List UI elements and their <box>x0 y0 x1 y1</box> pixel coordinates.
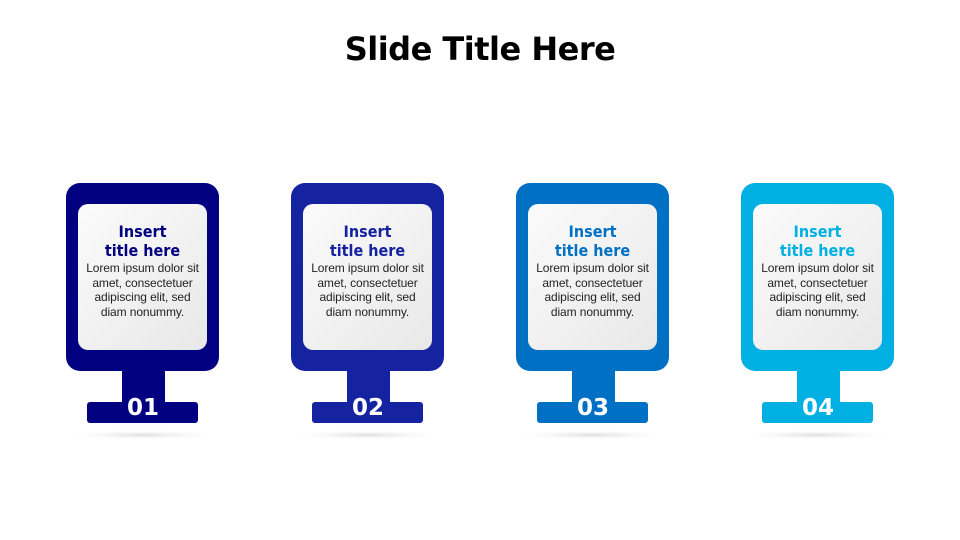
text box 1 <box>78 204 207 350</box>
text box 4: Lorem ipsum dolor sit amet, consectetuer adipiscing elit, sed diam nonummy. <box>761 261 874 318</box>
number 04: 04 <box>802 395 834 421</box>
text box 4: title here <box>780 241 855 260</box>
text box 2: title here <box>330 241 405 260</box>
card 1 <box>66 183 219 438</box>
card 3 <box>516 183 669 438</box>
card 4 <box>741 183 894 438</box>
number 01: 01 <box>127 395 159 421</box>
title: Slide Title Here <box>345 30 615 68</box>
text box 2 <box>303 204 432 350</box>
text box 3 <box>528 204 657 350</box>
text box 2: Lorem ipsum dolor sit amet, consectetuer adipiscing elit, sed diam nonummy. <box>311 261 424 318</box>
card 2 <box>291 183 444 438</box>
text box 1: title here <box>105 241 180 260</box>
text box 3: title here <box>555 241 630 260</box>
text box 3: Insert <box>569 222 616 241</box>
text box 1: Lorem ipsum dolor sit amet, consectetuer adipiscing elit, sed diam nonummy. <box>86 261 199 318</box>
text box 4 <box>753 204 882 350</box>
number 03: 03 <box>577 395 609 421</box>
text box 2: Insert <box>344 222 391 241</box>
number 02: 02 <box>352 395 384 421</box>
text box 3: Lorem ipsum dolor sit amet, consectetuer adipiscing elit, sed diam nonummy. <box>536 261 649 318</box>
text box 1: Insert <box>119 222 166 241</box>
text box 4: Insert <box>794 222 841 241</box>
